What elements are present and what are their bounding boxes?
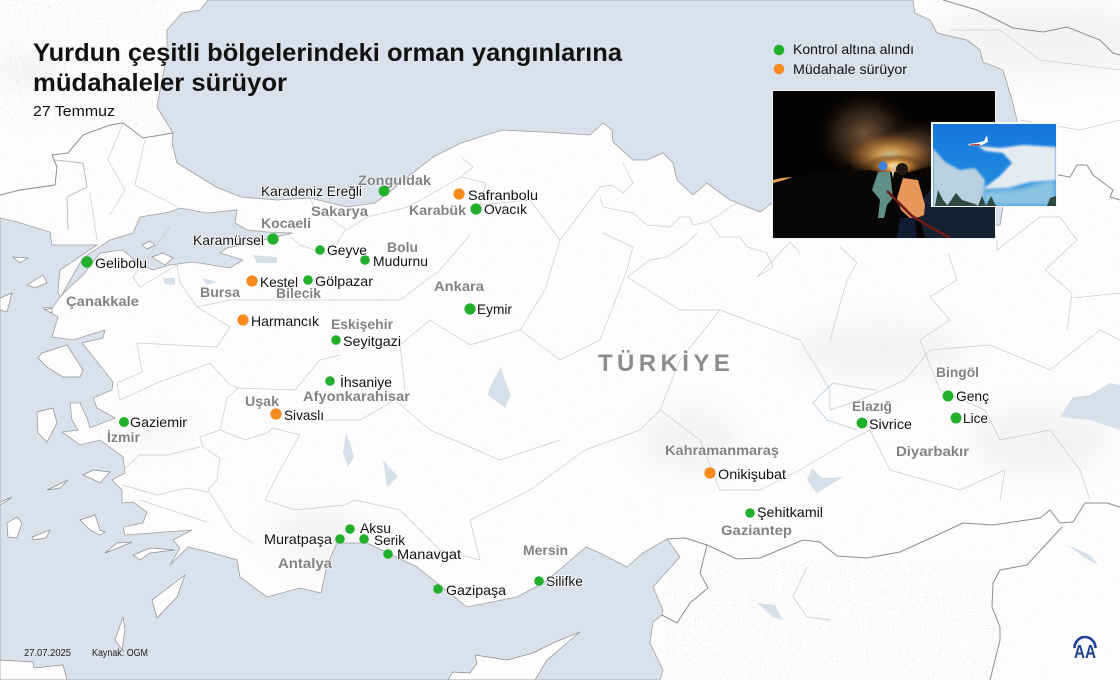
district labels: Silifke <box>546 573 583 589</box>
district labels: Gelibolu <box>95 255 147 271</box>
province labels: Elazığ <box>852 398 892 414</box>
district labels: Aksu <box>360 520 391 536</box>
province labels: Antalya <box>278 555 332 571</box>
rivers and reservoirs <box>793 383 877 620</box>
subtitle: date: 27 Temmuz <box>33 103 115 120</box>
district labels: Sivrice <box>869 416 912 432</box>
photo: firefighting plane <box>931 122 1058 207</box>
district labels: Harmancık <box>251 313 320 329</box>
province labels: Mersin <box>523 542 568 558</box>
province labels: Zonguldak <box>358 172 431 188</box>
footer: date: 27.07.2025 <box>24 648 71 659</box>
islands <box>0 241 580 680</box>
district labels: Gölpazar <box>315 273 373 289</box>
province labels: Bingöl <box>936 364 979 380</box>
legend: Kontrol altına alındı <box>793 41 914 57</box>
district labels: Manavgat <box>397 546 461 562</box>
district labels: Onikişubat <box>718 466 786 482</box>
province labels: Bilecik <box>276 285 321 301</box>
province labels <box>66 172 979 571</box>
district labels: Muratpaşa <box>264 531 332 547</box>
icon: AA logo <box>1074 637 1096 662</box>
district labels: Seyitgazi <box>343 333 401 349</box>
district labels: Karamürsel <box>193 232 264 248</box>
district labels: Karadeniz Ereğli <box>261 183 362 199</box>
province labels: Kocaeli <box>261 215 311 231</box>
legend <box>774 41 914 77</box>
province labels: Kahramanmaraş <box>665 442 779 458</box>
title <box>33 39 623 97</box>
district labels: Mudurnu <box>373 253 428 269</box>
fire markers: under control <box>81 186 962 594</box>
photo: firefighters at night <box>772 90 996 239</box>
province boundaries <box>20 30 1120 560</box>
district labels: İhsaniye <box>340 373 392 390</box>
sea: Aegean and Mediterranean <box>0 218 680 680</box>
district labels: Gaziemir <box>130 414 187 430</box>
district labels: Eymir <box>477 301 512 317</box>
district labels: Serik <box>374 532 406 548</box>
icon: AA logo: AA <box>1074 642 1096 662</box>
province labels: Ankara <box>434 278 484 294</box>
district labels: Kestel <box>260 274 298 290</box>
district labels: Ovacık <box>484 201 528 217</box>
fire markers: ongoing <box>237 188 716 479</box>
province labels: Çanakkale <box>66 293 139 309</box>
footer: source: Kaynak: OGM <box>92 648 148 659</box>
country label: TÜRKİYE <box>598 350 734 377</box>
legend: Müdahale sürüyor <box>793 61 907 77</box>
lakes <box>163 255 1120 620</box>
sea: Marmara <box>60 208 293 297</box>
province labels: Diyarbakır <box>896 443 970 459</box>
province labels: Eskişehir <box>331 316 394 332</box>
district labels: Gazipaşa <box>446 582 506 598</box>
district labels: Geyve <box>327 242 367 258</box>
title: Yurdun çeşitli bölgelerindeki orman yangınlarına <box>33 39 623 67</box>
province labels: İzmir <box>107 429 141 445</box>
district labels: Sivaslı <box>284 407 324 423</box>
province labels: Bursa <box>200 284 240 300</box>
district labels: Safranbolu <box>468 187 538 203</box>
title: müdahaleler sürüyor <box>33 69 287 97</box>
province labels: Afyonkarahisar <box>303 388 411 404</box>
province labels: Bolu <box>387 239 418 255</box>
district labels: Şehitkamil <box>757 504 823 520</box>
province labels: Karabük <box>409 202 466 218</box>
district labels: Lice <box>963 410 988 426</box>
district labels: Genç <box>956 388 989 404</box>
sea: Black Sea <box>157 0 1017 225</box>
province labels: Uşak <box>245 393 279 409</box>
province labels: Gaziantep <box>721 522 792 538</box>
district labels <box>95 183 989 598</box>
province labels: Sakarya <box>311 203 368 219</box>
